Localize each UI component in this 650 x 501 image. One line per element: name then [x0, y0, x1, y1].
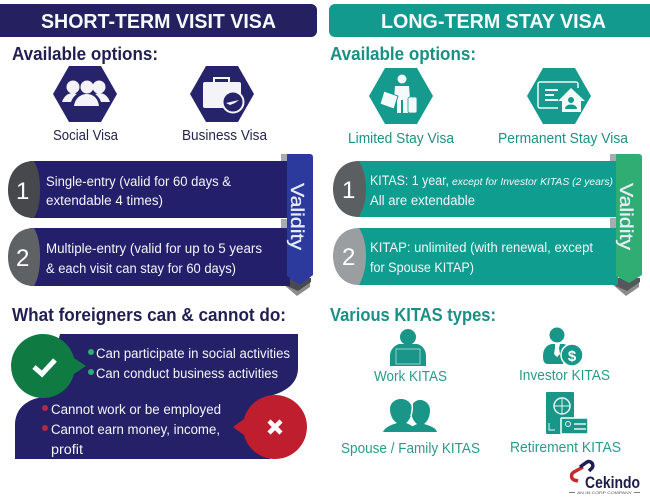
- heading: various kitas types: Various KITAS types:: [330, 305, 496, 325]
- label: retirement kitas: Retirement KITAS: [510, 440, 621, 456]
- logo: cekindo: [569, 462, 640, 495]
- heading: what foreigners can and cannot do: What foreigners can & cannot do:: [12, 305, 286, 325]
- validity ribbon: [616, 154, 642, 283]
- icon: work kitas: [390, 329, 426, 366]
- row 2: [8, 228, 290, 286]
- ribbon chevrons: [283, 278, 311, 296]
- row 1: 1: [16, 178, 29, 205]
- ribbon chevrons: [612, 278, 640, 296]
- label: investor kitas: Investor KITAS: [519, 368, 610, 384]
- row 2: 2: [16, 245, 29, 272]
- row 2: & each visit can stay for 60 days): [46, 261, 236, 276]
- icon: business visa: [190, 66, 254, 122]
- icon: limited stay visa: [369, 68, 433, 124]
- validity ribbon: [287, 154, 313, 285]
- icon: red cross: [233, 395, 307, 459]
- right column header: LONG-TERM STAY VISA: [381, 11, 606, 33]
- can list: [88, 346, 290, 381]
- row 2: KITAP: unlimited (with renewal, except: [370, 240, 593, 255]
- label: spouse family kitas: Spouse / Family KITAS: [341, 441, 480, 457]
- row 2: 2: [342, 244, 355, 271]
- icon: investor kitas: [543, 328, 583, 366]
- icon: green check: [11, 334, 86, 398]
- row 1: [333, 161, 616, 217]
- row 1: Single-entry (valid for 60 days &: [46, 174, 231, 189]
- logo: cekindo: AN IN.CORP COMPANY: [577, 490, 632, 495]
- row 1: except for Investor KITAS (2 years): [452, 176, 613, 188]
- cannot list: Cannot work or be employed: [51, 402, 221, 417]
- right column header: [329, 4, 650, 37]
- label: work kitas: Work KITAS: [374, 369, 447, 385]
- label: social visa: Social Visa: [53, 128, 119, 144]
- left column header: SHORT-TERM VISIT VISA: [41, 11, 276, 33]
- label: business visa: Business Visa: [182, 128, 268, 144]
- left column header: [0, 4, 317, 37]
- panel: long-term validity: [333, 154, 642, 296]
- icon: spouse family kitas: [383, 399, 437, 432]
- panel: can and cannot: [11, 334, 307, 459]
- row 2: [333, 228, 618, 285]
- heading: available options short-term: Available options:: [12, 44, 158, 64]
- row 1: KITAS: 1 year,: [370, 173, 449, 188]
- row 1: [8, 161, 287, 218]
- icon: investor kitas: $: [568, 348, 577, 365]
- icon: permanent stay visa: [527, 68, 591, 124]
- row 2: for Spouse KITAP): [370, 260, 474, 275]
- cannot list: Cannot earn money, income,: [51, 422, 220, 437]
- heading: available options long-term: Available options:: [330, 44, 476, 64]
- row 1: All are extendable: [370, 193, 475, 208]
- row 1: 1: [342, 177, 355, 204]
- row 2: Multiple-entry (valid for up to 5 years: [46, 241, 262, 256]
- panel: short-term validity: [8, 154, 313, 296]
- can list: Can participate in social activities: [96, 346, 290, 361]
- row 1: extendable 4 times): [46, 193, 163, 208]
- cannot list: [42, 402, 221, 457]
- icon: social visa: [53, 66, 117, 122]
- label: limited stay visa: Limited Stay Visa: [348, 131, 455, 147]
- can list: Can conduct business activities: [96, 366, 278, 381]
- validity label: Validity: [287, 183, 307, 250]
- validity label: Validity: [616, 183, 636, 250]
- label: permanent stay visa: Permanent Stay Visa: [498, 131, 629, 147]
- icon: retirement kitas: [546, 392, 588, 434]
- cannot list: profit: [51, 442, 83, 457]
